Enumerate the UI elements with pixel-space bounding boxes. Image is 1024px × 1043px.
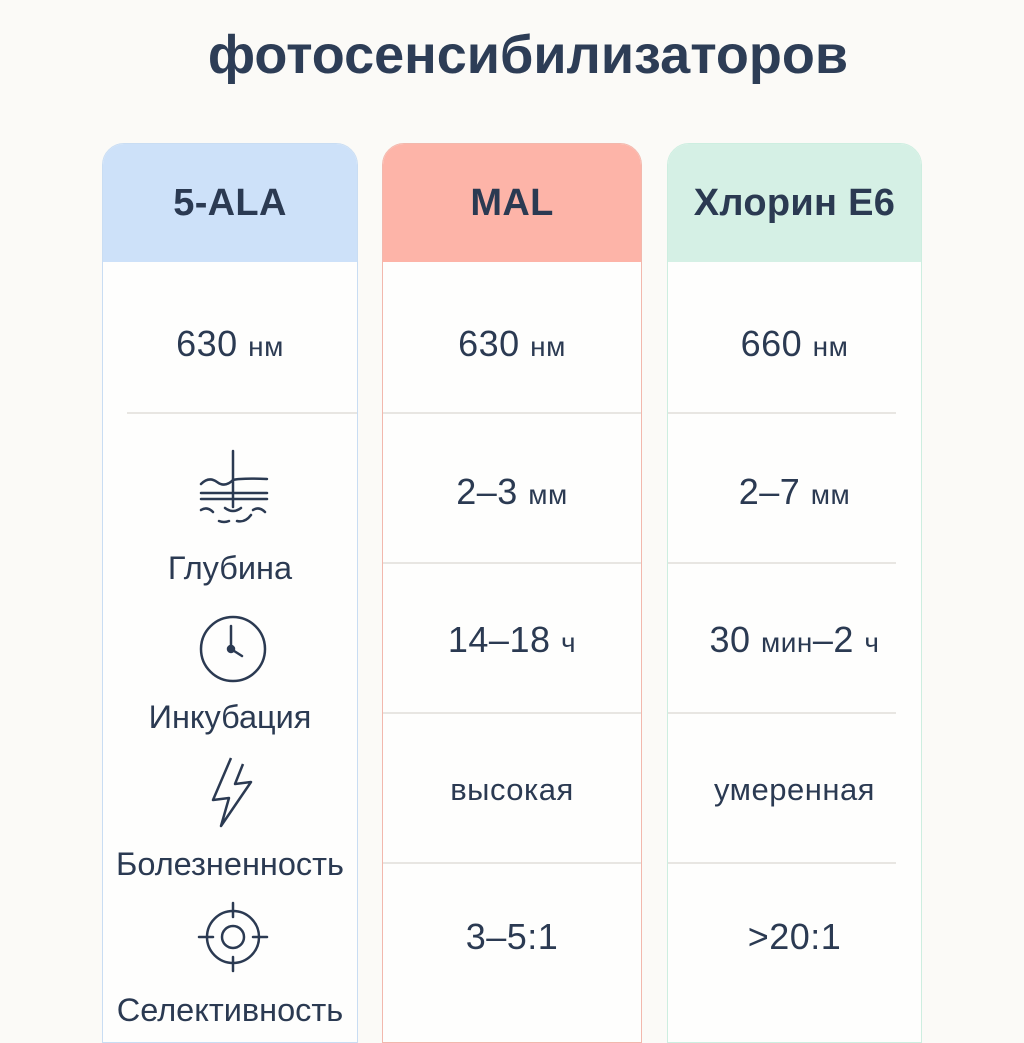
label: selectivity: Селективность: [117, 992, 343, 1028]
value: depth: 2–7 мм: [739, 471, 850, 512]
label: incubation: Инкубация: [149, 699, 311, 735]
value: depth: 2–3 мм: [456, 471, 568, 512]
value: pain: умеренная: [714, 772, 875, 807]
value: selectivity: >20:1: [748, 916, 841, 957]
value: wavelength: 660 нм: [741, 323, 848, 364]
header: Chlorin E6: Хлорин Е6: [694, 182, 895, 224]
icon: lightning: [212, 758, 252, 828]
label: pain: Болезненность: [116, 846, 344, 882]
icon: clock: [200, 616, 266, 682]
value: pain: высокая: [450, 772, 574, 807]
value: incubation: 14–18 ч: [448, 619, 576, 660]
icon: target: [198, 902, 268, 972]
panel: Chlorin E6: [667, 143, 922, 1043]
header: MAL: MAL: [470, 182, 554, 224]
label: depth: Глубина: [168, 550, 292, 586]
header: 5-ALA: 5-ALA: [173, 182, 287, 224]
icon: depth: [200, 450, 268, 524]
value: wavelength: 630 нм: [176, 323, 284, 364]
title: фотосенсибилизаторов: [208, 25, 848, 85]
header: 5-ALA: [103, 144, 357, 262]
value: wavelength: 630 нм: [458, 323, 566, 364]
header: Chlorin E6: [668, 144, 921, 262]
panel: MAL: [382, 143, 642, 1043]
value: incubation: 30 мин–2 ч: [709, 619, 880, 660]
value: selectivity: 3–5:1: [466, 916, 558, 957]
header: MAL: [383, 144, 641, 262]
panel: 5-ALA: [102, 143, 358, 1043]
